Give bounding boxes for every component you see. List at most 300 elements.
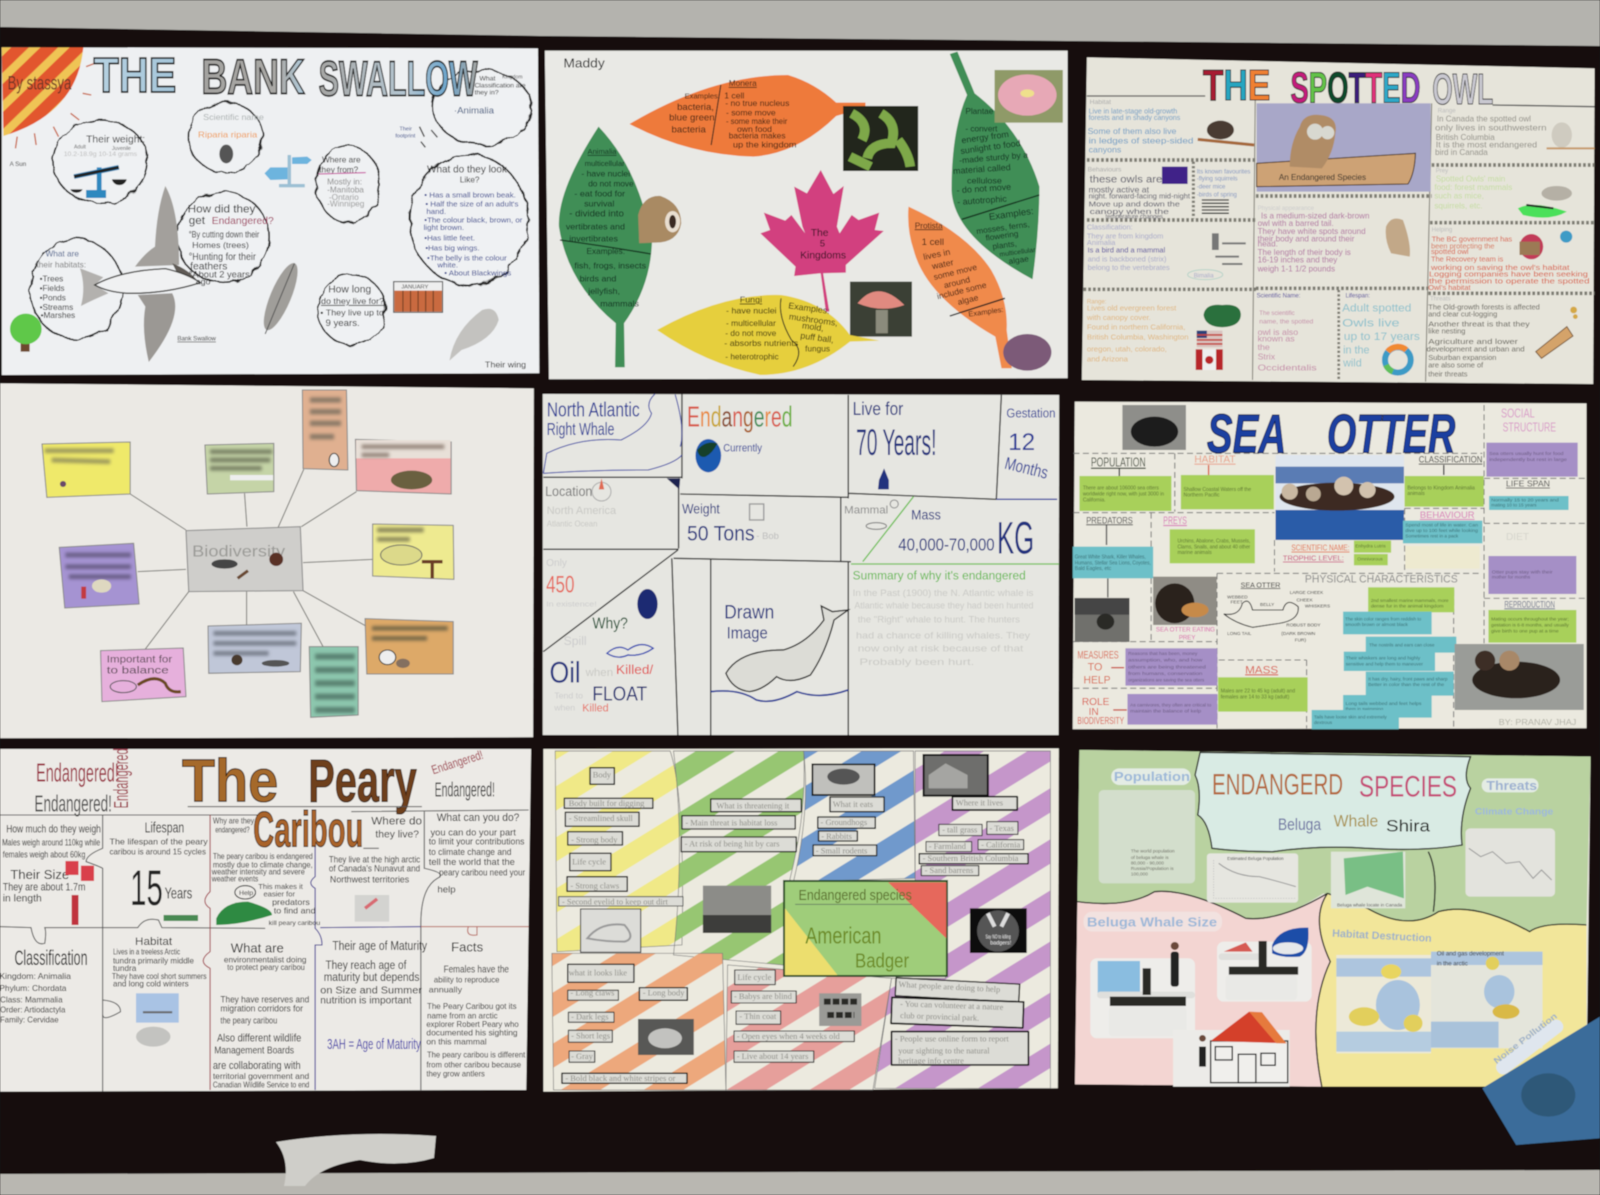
endangered cloud bbox=[188, 204, 274, 287]
mass: MASS bbox=[1245, 664, 1279, 676]
behaviour: BEHAVIOUR bbox=[1420, 509, 1475, 520]
yellow leaf: Fungi: - do not move bbox=[725, 328, 776, 338]
green leaf: Animalia: - divided into bbox=[569, 209, 624, 220]
owl on branch scene bbox=[1257, 103, 1431, 192]
title: THE bbox=[1203, 62, 1270, 110]
threats section: Threats bbox=[1430, 297, 1451, 303]
lifespan section bbox=[110, 821, 208, 921]
weight cloud: 10.2-18.9g 10-14 grams bbox=[64, 151, 138, 158]
habitat section: They have cool short summers bbox=[112, 972, 207, 981]
physical description section: The length of their body is bbox=[1258, 248, 1351, 257]
orange leaf: Protista: Examples: bbox=[968, 305, 1004, 319]
conservation section: Logging companies have been seeking bbox=[1429, 270, 1588, 279]
arctic map 1 bbox=[1336, 955, 1431, 1053]
classification cloud: What bbox=[479, 76, 496, 83]
range section: British Columbia, Washington bbox=[1087, 332, 1189, 341]
label strips: What it eats bbox=[833, 800, 873, 809]
green leaf: Plantae: - do not move bbox=[956, 182, 1012, 195]
yellow leaf: Fungi: - multicellular bbox=[726, 318, 776, 328]
weight section: They are about 1.7m bbox=[3, 881, 85, 893]
title cloud: Beluga bbox=[1278, 815, 1322, 834]
tree bbox=[10, 314, 42, 352]
physical characteristics: Tails have loose skin and extremely bbox=[1314, 714, 1387, 719]
endangered cloud: °Hunting for their bbox=[189, 251, 256, 263]
endangered scribbles: Endangered! bbox=[36, 758, 119, 788]
otter diagram: FEET bbox=[1231, 599, 1243, 604]
feather bbox=[257, 260, 304, 334]
masking tape bbox=[276, 1134, 436, 1186]
scientific name section: name, the spotted bbox=[1259, 318, 1314, 325]
centre title card bbox=[784, 881, 947, 976]
photo: bacteria bbox=[843, 106, 918, 171]
reproduction: give birth to one pup at a time bbox=[1491, 629, 1559, 634]
green leaf: Animalia: vertibrates and bbox=[566, 221, 625, 231]
scale with car and whale bbox=[1217, 928, 1312, 1002]
tag: noise pollution bbox=[1482, 1011, 1600, 1145]
location section bbox=[1435, 109, 1595, 157]
classification section: Is a bird and a mammal bbox=[1088, 246, 1166, 255]
conservation section: the permission to operate the spotted bbox=[1429, 276, 1590, 285]
population note: Russia/Population is bbox=[1131, 866, 1174, 871]
otter diagram: LARGE CHEEK bbox=[1290, 590, 1324, 595]
habitat: HABITAT bbox=[1194, 455, 1236, 466]
green leaf: Plantae: material called bbox=[953, 162, 1011, 176]
why reasons: FLOAT bbox=[592, 684, 647, 706]
title bbox=[1203, 62, 1493, 114]
lifespan section: in the bbox=[1343, 344, 1370, 356]
label strips: - Gray bbox=[571, 1052, 594, 1061]
population: California. bbox=[1083, 497, 1106, 503]
weight section: females weigh about 60kg bbox=[3, 850, 85, 861]
photo: cubs bbox=[819, 993, 861, 1026]
look like cloud: light brown. bbox=[424, 223, 464, 232]
food section: squirrels, etc. bbox=[1434, 201, 1483, 210]
endangered scribbles bbox=[34, 747, 495, 818]
range section: Found in northern California, bbox=[1087, 322, 1185, 331]
bird drawing bbox=[80, 186, 217, 362]
range section: and Arizona bbox=[1087, 355, 1129, 364]
box: brown bbox=[365, 619, 453, 674]
label strips: - California bbox=[981, 841, 1020, 850]
arctic map 2 bbox=[1431, 952, 1543, 1048]
habitats cloud: •Fields bbox=[40, 284, 65, 293]
green leaf: Animalia: Examples: bbox=[586, 247, 625, 256]
gestation: Months bbox=[1003, 453, 1050, 483]
panel: American Badger poster bbox=[543, 748, 1059, 1092]
map: beluga whale location: Beluga whale locate in Canada bbox=[1337, 902, 1402, 907]
photo: city bbox=[703, 886, 771, 933]
yellow leaf: Fungi: mold, bbox=[801, 321, 825, 333]
environmentalists section: Also different wildlife bbox=[217, 1033, 301, 1045]
scientific name section: The scientific bbox=[1259, 311, 1295, 317]
classification cloud bbox=[454, 75, 526, 116]
label strips: - You can volunteer at a nature bbox=[900, 999, 1004, 1012]
box: blue bbox=[208, 623, 301, 673]
scientific name section: Strix bbox=[1258, 351, 1276, 361]
habitat section: Habitat bbox=[1090, 99, 1111, 106]
why reasons: when bbox=[585, 667, 613, 679]
facts section: The Peary Caribou got its bbox=[427, 1002, 517, 1011]
scientific name section: the bbox=[1258, 342, 1270, 352]
label strips: - Babys are blind bbox=[734, 992, 793, 1001]
diet note and stripes: -flying squirrels bbox=[1197, 177, 1238, 183]
age of maturity section: nutrition is important bbox=[320, 995, 412, 1006]
orange leaf: Protista: water bbox=[930, 257, 954, 271]
what can you do section: tell the world that the bbox=[429, 857, 515, 868]
panel: Beluga Whale poster bbox=[1075, 750, 1600, 1145]
habitat section: tundra bbox=[113, 964, 137, 973]
label strips: - Farmland bbox=[929, 842, 967, 851]
heading: beluga whale size: Beluga Whale Size bbox=[1087, 915, 1217, 930]
yellow leaf: Fungi: - heterotrophic bbox=[725, 351, 779, 361]
location: Location bbox=[545, 483, 592, 499]
lifespan section: 15 bbox=[130, 860, 163, 916]
photo: protist bbox=[1003, 334, 1051, 371]
weight cloud: Their weight: bbox=[86, 135, 145, 146]
orange leaf: Monera: bacteria bbox=[672, 125, 707, 136]
label strips: Body bbox=[593, 771, 612, 780]
location section: In Canada the spotted owl bbox=[1437, 115, 1531, 124]
threats section: The Old-growth forests is affected bbox=[1428, 302, 1540, 311]
title bbox=[182, 748, 417, 857]
green leaf: Animalia: mammals bbox=[600, 299, 640, 309]
facts section: The peary caribou is different bbox=[427, 1051, 526, 1060]
endangered cloud: feathers bbox=[190, 261, 227, 272]
maple leaf title: 5 bbox=[820, 239, 825, 250]
green leaf: Animalia: jellyfish, bbox=[587, 286, 620, 296]
lifespan bbox=[853, 398, 936, 489]
classification section: Family: Cervidae bbox=[0, 1015, 59, 1024]
what can you do section: you can do your part bbox=[430, 828, 516, 839]
green leaf: Animalia: invertibrates bbox=[569, 234, 619, 244]
behaviour section: these owls are bbox=[1090, 175, 1163, 186]
population: worldwide right now, with just 3000 in bbox=[1083, 491, 1164, 497]
box: red bbox=[355, 439, 451, 494]
classification cloud: ·Animalia bbox=[454, 105, 495, 116]
photo: lotus flower bbox=[995, 70, 1063, 123]
endangered scribbles: Endangered! bbox=[435, 780, 495, 802]
scientific name and trophic level bbox=[1283, 541, 1391, 565]
orange leaf: Protista: some move bbox=[932, 262, 978, 282]
habitats cloud: •Streams bbox=[40, 303, 73, 312]
green leaf: Animalia: Animalia bbox=[588, 147, 617, 156]
green leaf: Plantae: Plantae bbox=[965, 107, 994, 116]
green leaf: Plantae: plants, bbox=[992, 239, 1017, 251]
age of maturity section bbox=[320, 938, 428, 1053]
green leaf: Plantae: flowering bbox=[985, 229, 1019, 243]
tag: noise pollution: Noise Pollution bbox=[1492, 1011, 1559, 1066]
measures to help: Reasons that has been, money bbox=[1128, 651, 1198, 656]
behaviour: dive up to 100 feet while looking bbox=[1405, 528, 1478, 533]
scientific name cloud bbox=[198, 112, 264, 163]
label strips: - Small rodents bbox=[816, 846, 867, 855]
label strips: What people are doing to help bbox=[898, 980, 1000, 994]
green leaf: Animalia: fish, frogs, insects bbox=[574, 261, 647, 271]
social structure bbox=[1486, 405, 1578, 477]
classification section: Bimalia bbox=[1194, 273, 1214, 279]
heading: population: Population bbox=[1114, 769, 1190, 784]
photo: otter on rock bbox=[1122, 405, 1186, 450]
endangered cloud: Homes (trees) bbox=[192, 240, 249, 250]
summary: Summary of why it's endangered bbox=[853, 568, 1026, 582]
heading: climate change: Climate Change bbox=[1475, 805, 1553, 816]
footprint note bbox=[395, 127, 437, 147]
population note bbox=[1099, 790, 1195, 883]
threats section: like nesting bbox=[1428, 326, 1465, 335]
mass: KG bbox=[997, 513, 1034, 563]
mass bbox=[898, 506, 1034, 563]
endangered cloud: °About 2 years bbox=[189, 269, 250, 279]
label strips: - Long claws bbox=[570, 989, 614, 998]
label strips: club or provincial park. bbox=[900, 1011, 979, 1023]
conservation section bbox=[1428, 228, 1590, 292]
lifespan cloud: 9 years. bbox=[325, 318, 360, 329]
diet note and stripes: Its known favourites bbox=[1197, 169, 1250, 175]
threats section: are also some of bbox=[1428, 360, 1484, 369]
what can you do section: What can you do? bbox=[437, 812, 519, 824]
photo: mushroom bbox=[850, 282, 912, 337]
habitat bbox=[1181, 455, 1274, 509]
classification cloud: they in? bbox=[475, 90, 499, 97]
habitats cloud: •Marshes bbox=[41, 311, 75, 320]
green leaf: Animalia: - have nuclei bbox=[581, 169, 630, 179]
measures to help: organizations are saving the sea otters bbox=[1128, 678, 1205, 683]
endangered scribbles: Endangered! bbox=[34, 792, 112, 818]
summary: Atlantic whale because they had been hunted bbox=[854, 600, 1033, 610]
reproduction bbox=[1488, 599, 1576, 643]
heading: habitat destruction: Habitat Destruction bbox=[1332, 928, 1432, 945]
box: purple bbox=[59, 543, 139, 608]
why reasons: Killed/ bbox=[616, 662, 654, 677]
food section: food: forest mammals bbox=[1434, 183, 1512, 192]
look like cloud: •Has little feet. bbox=[424, 234, 475, 243]
gestation: 12 bbox=[1008, 429, 1035, 456]
direction sign bbox=[264, 155, 312, 187]
habitat: Shallow Coastal Waters off the bbox=[1184, 487, 1251, 493]
physical characteristics: It has dry, hairy, front paws and sharp bbox=[1368, 677, 1448, 682]
age of maturity section: maturity but depends bbox=[324, 970, 419, 984]
location section: Range bbox=[1438, 109, 1456, 115]
label strips: - Main threat is habitat loss bbox=[685, 819, 777, 828]
why endangered section: The peary caribou is endangered bbox=[213, 852, 313, 861]
title: BANK bbox=[201, 49, 305, 104]
habitats cloud: •Ponds bbox=[40, 294, 66, 303]
otter diagram: WHISKERS bbox=[1305, 603, 1330, 608]
otter diagram: FUR) bbox=[1295, 638, 1306, 643]
scientific name section: Occidentalis bbox=[1258, 363, 1318, 373]
range section bbox=[1086, 299, 1241, 370]
photo: badger food bbox=[812, 764, 875, 795]
species title: Right Whale bbox=[547, 419, 614, 439]
calendar bbox=[394, 282, 443, 312]
social structure: STRUCTURE bbox=[1503, 420, 1556, 435]
weight section: in length bbox=[3, 894, 42, 905]
facts section: from other caribou because bbox=[426, 1061, 522, 1070]
life span bbox=[1489, 480, 1569, 510]
heading: beluga whale size bbox=[1084, 912, 1222, 932]
arctic map 2: in the arctic bbox=[1437, 962, 1468, 968]
facts section: on this mammal bbox=[426, 1037, 487, 1046]
lifespan cloud: do they live for? bbox=[321, 296, 384, 306]
sign: be kind to badgers bbox=[970, 908, 1027, 953]
title: THE bbox=[94, 48, 176, 103]
range section: with canopy cover. bbox=[1086, 313, 1151, 322]
scientific name and trophic level: TROPHIC LEVEL: bbox=[1283, 554, 1344, 563]
gestation bbox=[1003, 405, 1055, 483]
green leaf: Animalia bbox=[559, 127, 652, 367]
life span: mating 10 to 15 years bbox=[1491, 503, 1537, 508]
label strips: - tall grass bbox=[942, 825, 977, 834]
weight cloud: Juvenile bbox=[112, 146, 131, 152]
why endangered section: weather events bbox=[211, 875, 258, 884]
classification: animals bbox=[1407, 491, 1425, 497]
physical characteristics: Better in color than the rest of the bbox=[1368, 682, 1445, 687]
classification: Belongs to Kingdom Animalia bbox=[1407, 485, 1475, 491]
look like cloud: •The belly is the colour bbox=[427, 254, 507, 263]
population: In existence! bbox=[546, 600, 597, 609]
environmentalists section: to protect peary caribou bbox=[227, 963, 305, 972]
measures to help: from humans, conservation bbox=[1128, 671, 1203, 676]
mass: females are 14 to 33 kg (adult) bbox=[1221, 695, 1290, 701]
threats section: their threats bbox=[1428, 370, 1468, 379]
measures to help: TO bbox=[1088, 662, 1102, 674]
behaviour bbox=[1403, 509, 1482, 569]
physical characteristics: 2nd smallest marine mammals, more bbox=[1371, 598, 1449, 603]
gestation: Gestation bbox=[1006, 405, 1055, 420]
dashed dividers bbox=[1073, 405, 1585, 728]
measures to help: assumption, who, and how bbox=[1128, 658, 1204, 663]
classification section: Kingdom: Animalia bbox=[0, 972, 71, 981]
conservation section: been protecting the bbox=[1431, 241, 1495, 250]
endangered scribbles: Endangered bbox=[111, 748, 133, 808]
lifespan section: Adult spotted bbox=[1342, 303, 1411, 315]
where from cloud: -Winnipeg bbox=[327, 200, 364, 209]
why reasons: Why? bbox=[592, 615, 628, 632]
summary: had a chance of killing whales. They bbox=[856, 630, 1031, 640]
section grid bbox=[1084, 96, 1595, 382]
title: Caribou bbox=[253, 801, 363, 857]
physical characteristics: dextrous bbox=[1314, 720, 1333, 725]
weight section: Males weigh around 110kg while bbox=[2, 838, 100, 849]
green leaf: Animalia: - eat food for bbox=[574, 189, 625, 199]
where section bbox=[329, 815, 422, 922]
title bbox=[94, 48, 478, 106]
maple leaf title: Kingdoms bbox=[800, 251, 846, 262]
otter diagram bbox=[1224, 582, 1330, 643]
facts section: documented his sighting bbox=[426, 1029, 518, 1038]
title: OTTER bbox=[1327, 403, 1455, 465]
where from cloud: Where are bbox=[322, 156, 361, 165]
panel: The Spotted Owl poster bbox=[1082, 57, 1595, 384]
where from cloud: Mostly in: bbox=[327, 177, 362, 186]
social structure: Sea otters usually hunt for food bbox=[1489, 451, 1564, 456]
why endangered section: predators bbox=[272, 897, 310, 907]
where section: they live? bbox=[375, 830, 419, 841]
endangered scribbles: Endangered! bbox=[429, 747, 485, 777]
maple leaf title: The bbox=[811, 228, 829, 239]
threats section: Agriculture and lower bbox=[1428, 337, 1519, 346]
behaviour section: Behaviours bbox=[1088, 167, 1122, 174]
yellow leaf: Fungi bbox=[657, 295, 879, 375]
orange leaf: Monera: - no true nucleus bbox=[725, 98, 789, 108]
chart: estimated beluga population bbox=[1207, 853, 1298, 903]
predators: PREDATORS bbox=[1086, 514, 1133, 525]
summary: now only at risk because of that bbox=[858, 644, 1024, 654]
what can you do section bbox=[429, 812, 525, 895]
classification cloud: Kingdom bbox=[502, 75, 523, 81]
conservation section: spotted owl bbox=[1431, 247, 1469, 256]
photo: lion bbox=[638, 196, 681, 243]
yellow leaf: Fungi: - have nuclei bbox=[726, 305, 777, 315]
weight section: Their Size bbox=[10, 867, 69, 882]
species title bbox=[547, 399, 640, 439]
range section: oregon, utah, colorado, bbox=[1087, 345, 1167, 354]
habitat section: Some of them also live bbox=[1088, 126, 1177, 136]
puzzle lines bbox=[0, 810, 529, 1092]
lifespan section: The lifespan of the peary bbox=[110, 836, 208, 846]
threats section: Another threat is that they bbox=[1428, 320, 1530, 329]
label strips: - Thin coat bbox=[739, 1012, 777, 1021]
sun in corner bbox=[2, 47, 95, 168]
orange leaf: Monera: - some move bbox=[726, 107, 776, 117]
physical description section: head. bbox=[1258, 240, 1278, 249]
orange leaf: Monera: 1 cell bbox=[724, 90, 744, 100]
section lines bbox=[543, 394, 1059, 735]
lifespan section: wild bbox=[1342, 358, 1362, 370]
age of maturity section: Their age of Maturity bbox=[332, 938, 428, 953]
facts section: name from an arctic bbox=[427, 1011, 498, 1020]
photo: skull bbox=[581, 909, 641, 952]
physical description section: Is a medium-sized dark-brown bbox=[1261, 211, 1370, 220]
measures to help: MEASURES bbox=[1077, 649, 1119, 661]
endangered heading bbox=[687, 402, 792, 472]
title: OWL bbox=[1432, 66, 1493, 114]
habitats cloud: •Trees bbox=[40, 275, 63, 284]
location section: only lives in southwestern bbox=[1435, 124, 1547, 133]
physical characteristics: sensitive and help them to maneuver bbox=[1346, 661, 1423, 666]
diet note and stripes: -deer mice bbox=[1197, 184, 1226, 190]
lifespan section: Years bbox=[165, 886, 192, 902]
endangered cloud: get bbox=[189, 215, 206, 227]
why endangered section bbox=[211, 816, 320, 927]
title: SPOTTED bbox=[1290, 65, 1421, 113]
heading: threats: Threats bbox=[1486, 778, 1537, 793]
weight cloud: Adult bbox=[74, 144, 86, 150]
why endangered section: to find and bbox=[274, 905, 316, 915]
reproduction: gestation is 6-8 months, and usually bbox=[1491, 623, 1570, 628]
predators: Bald Eagles, etc bbox=[1075, 566, 1112, 572]
purple note: Otter pups stay with their bbox=[1492, 569, 1553, 574]
weight: 50 Tons bbox=[687, 522, 755, 546]
yellow leaf: Fungi: fungus bbox=[805, 345, 830, 354]
classification section: Phylum: Chordata bbox=[0, 984, 67, 993]
social structure: SOCIAL bbox=[1501, 405, 1535, 420]
what can you do section: to limit your contributions bbox=[429, 836, 525, 847]
box: orange bbox=[302, 390, 348, 470]
house and person bbox=[1173, 1012, 1290, 1087]
arctic map 2: Oil and gas development bbox=[1437, 952, 1504, 958]
wing sketch bbox=[449, 309, 526, 369]
orange leaf: Protista: Protista bbox=[915, 221, 943, 230]
title: SEA bbox=[1207, 403, 1286, 465]
green leaf: Plantae: - autotrophic bbox=[957, 194, 1008, 207]
footprint note: footprint bbox=[395, 133, 416, 139]
orange leaf: Protista: around bbox=[943, 274, 971, 290]
look like cloud: •The colour black, brown, or bbox=[424, 216, 523, 225]
label strips: - Short legs bbox=[571, 1031, 610, 1040]
threats section bbox=[1427, 297, 1578, 379]
role in biodiversity: BIODIVERSITY bbox=[1077, 716, 1124, 727]
